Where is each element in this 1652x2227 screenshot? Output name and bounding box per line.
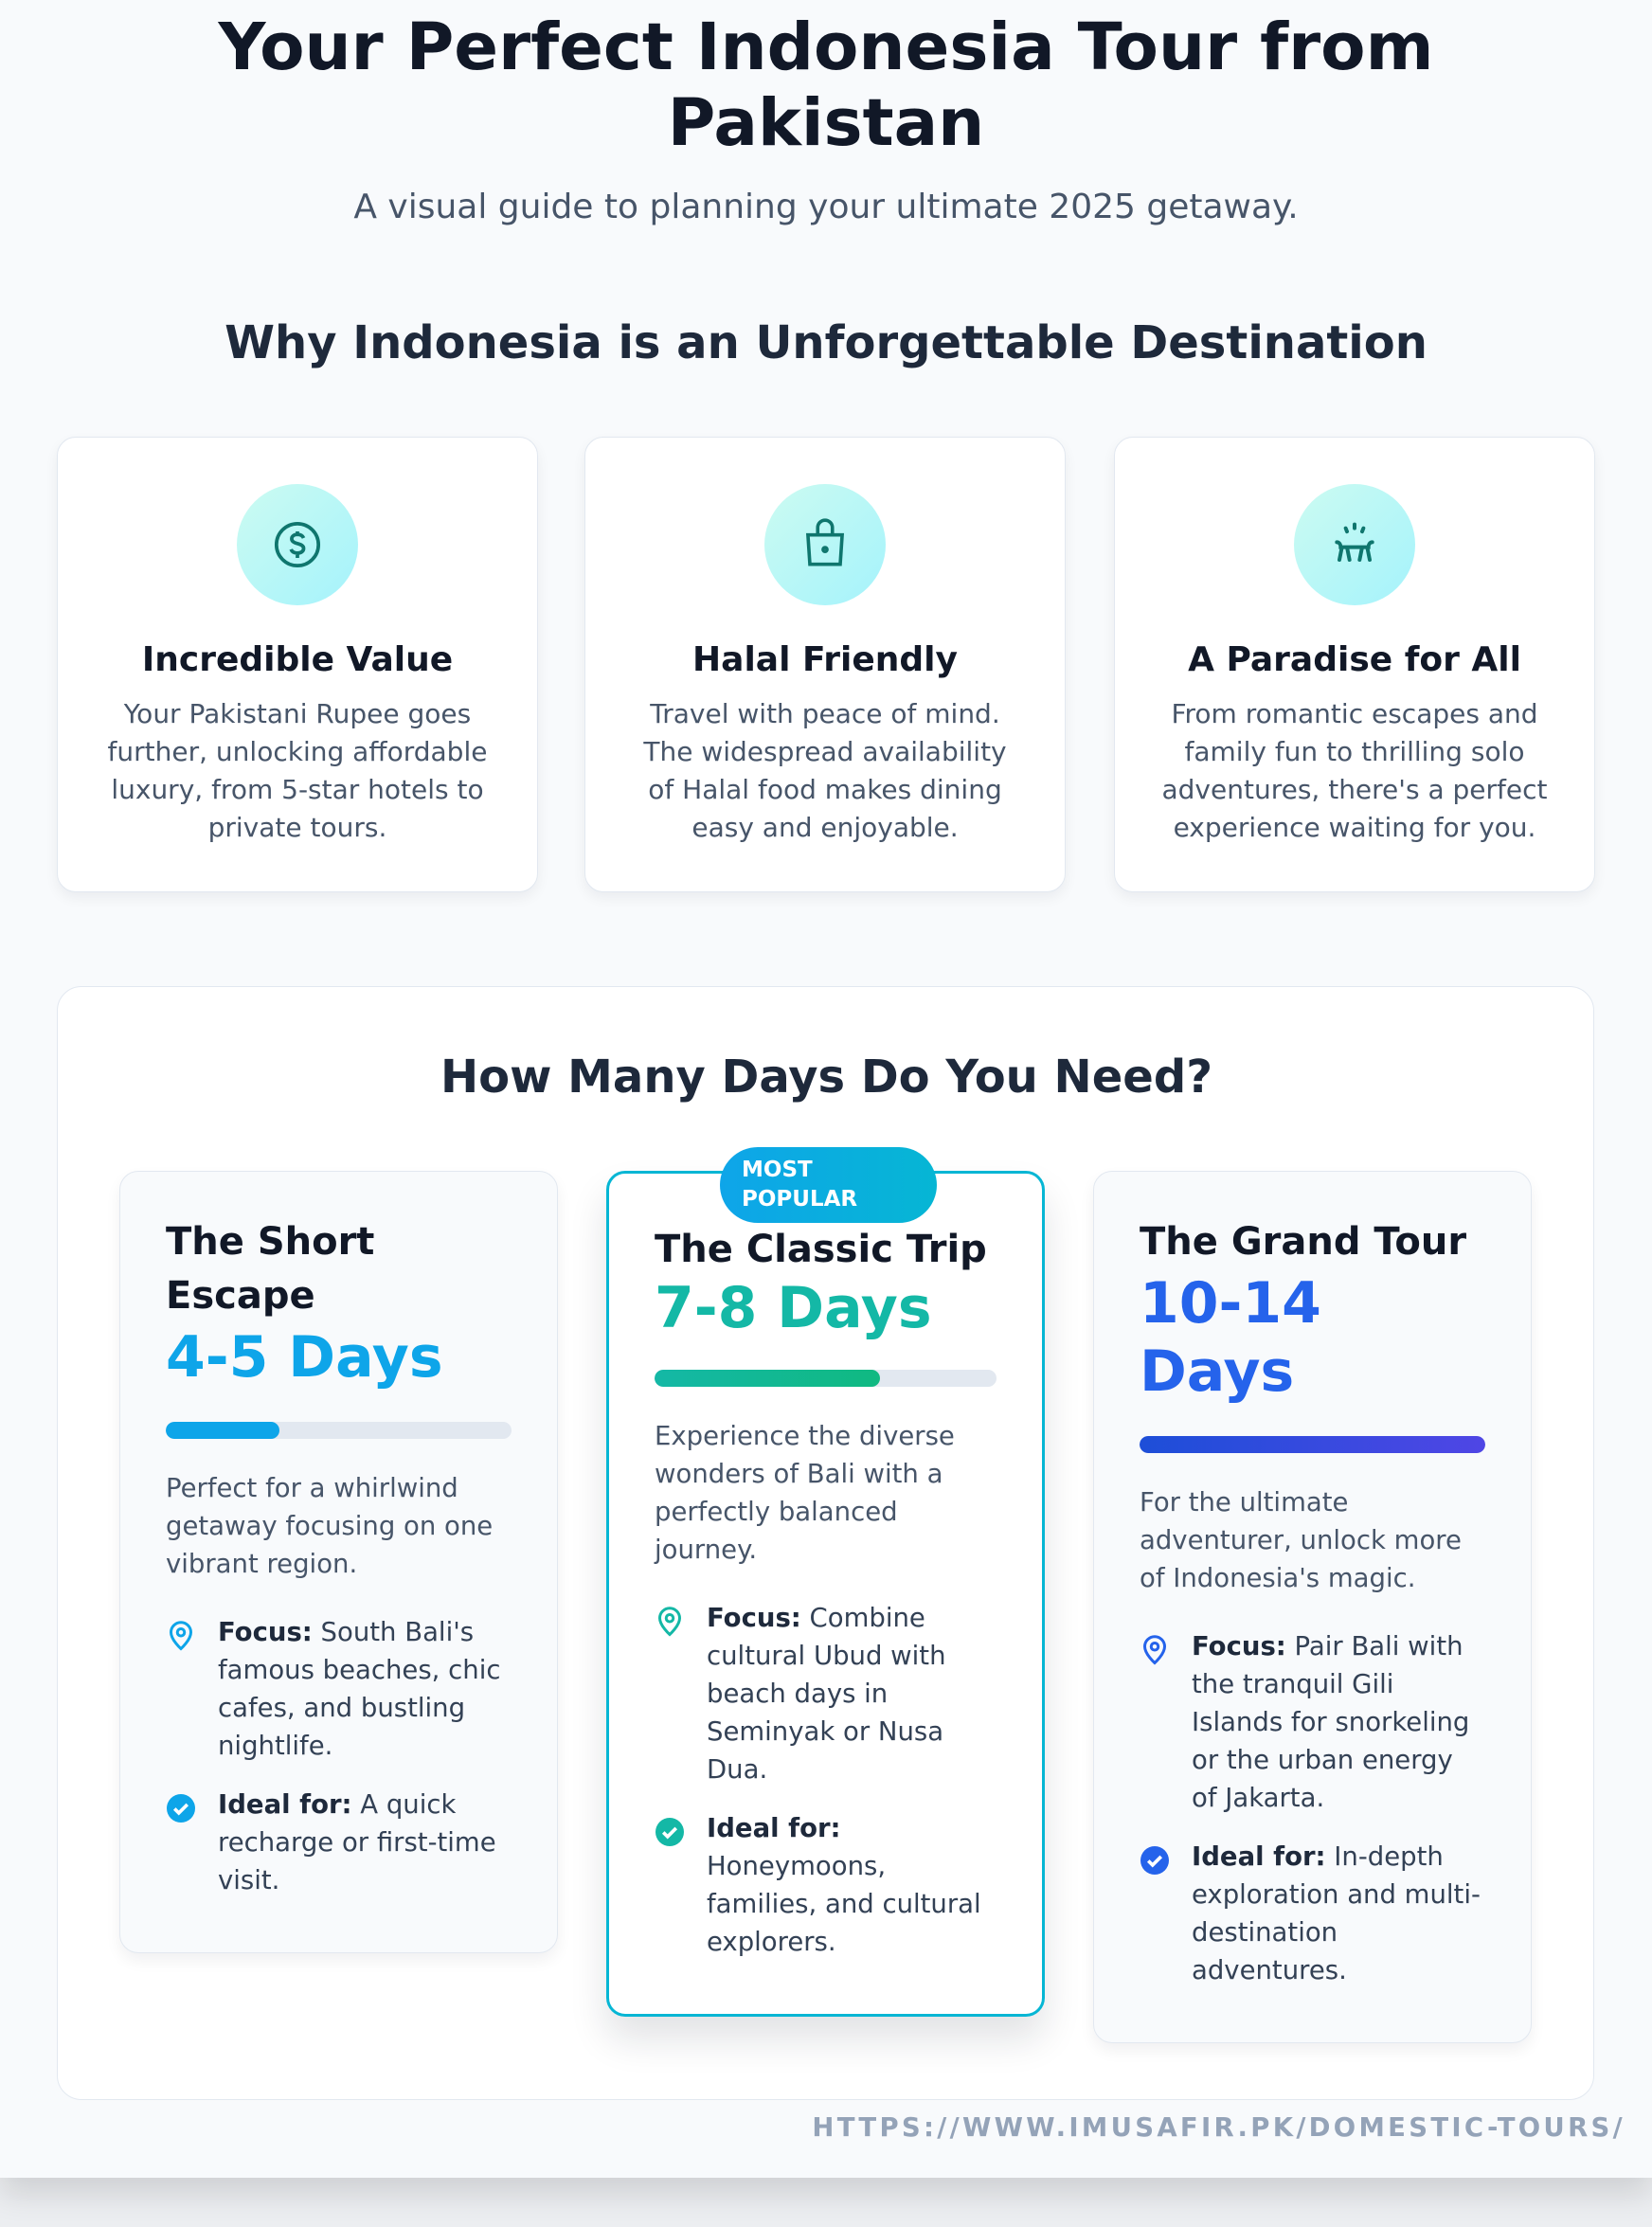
card: grand tour: 10-14 — [1140, 1270, 1321, 1337]
card: short escape: 4-5 Days — [166, 1324, 443, 1391]
card: grand tour: The Grand Tour — [1140, 1220, 1466, 1264]
focus item — [1143, 1631, 1469, 1813]
focus item: Focus: South Bali's famous beaches, chic cafes, and bustling nightlife. — [218, 1617, 500, 1761]
panel: how many days — [57, 986, 1594, 2100]
badge: most popular — [720, 1147, 937, 1223]
heading: how many days: How Many Days Do You Need? — [440, 1051, 1212, 1104]
icon: celebration — [1294, 484, 1415, 605]
icon: dollar — [237, 484, 358, 605]
panel: paradise for all: From romantic escapes and family fun to thrilling solo adventures, there's a perfect experience waiting for you. — [1161, 698, 1548, 843]
focus item: of Jakarta. — [1192, 1783, 1324, 1813]
footer url: HTTPS://WWW.IMUSAFIR.PK/DOMESTIC-TOURS/ — [812, 2112, 1625, 2143]
progress bar — [655, 1370, 997, 1387]
heading: why indonesia: Why Indonesia is an Unforgettable Destination — [224, 316, 1428, 369]
card: grand tour: Days — [1140, 1338, 1294, 1405]
focus item: Focus: Pair Bali with the tranquil Gili Islands for snorkeling or the urban energy — [1192, 1631, 1469, 1775]
title: Your Perfect Indonesia Tour from — [219, 9, 1433, 85]
ideal item: Ideal for: In-depth exploration and multi-destination adventures. — [1192, 1841, 1481, 1985]
card: grand tour — [1093, 1171, 1532, 2043]
panel: paradise for all: A Paradise for All — [1188, 640, 1521, 679]
focus item: Focus: Combine cultural Ubud with beach days in Seminyak or Nusa Dua. — [707, 1603, 945, 1785]
card: short escape — [119, 1171, 558, 1953]
card: classic trip — [606, 1171, 1045, 2017]
card: classic trip: The Classic Trip — [655, 1228, 987, 1271]
panel: halal friendly — [584, 437, 1066, 892]
card: short escape: The Short — [166, 1220, 374, 1264]
progress bar — [1140, 1436, 1485, 1453]
card: short escape: Escape — [166, 1274, 315, 1318]
panel: incredible value: Your Pakistani Rupee goes further, unlocking affordable luxury, from 5-star hotels to private tours. — [108, 698, 487, 843]
panel: paradise for all — [1114, 437, 1595, 892]
panel: incredible value: Incredible Value — [142, 640, 453, 679]
ideal item: Ideal for: A quick recharge or first-time visit. — [218, 1789, 496, 1895]
panel: halal friendly: Halal Friendly — [692, 640, 958, 679]
card: classic trip: 7-8 Days — [655, 1275, 932, 1341]
icon: bag — [764, 484, 886, 605]
progress bar — [166, 1422, 512, 1439]
title — [218, 9, 1433, 161]
panel: incredible value — [57, 437, 538, 892]
subtitle: A visual guide to planning your ultimate 2025 getaway. — [353, 188, 1299, 226]
badge: most popular: MOST — [742, 1158, 813, 1182]
badge: most popular: POPULAR — [742, 1187, 857, 1212]
card: grand tour: For the ultimate adventurer, unlock more of Indonesia's magic. — [1140, 1487, 1462, 1593]
panel: halal friendly: Travel with peace of mind. The widespread availability of Halal food makes dining easy and enjoyable. — [643, 698, 1007, 843]
card: classic trip: Experience the diverse wonders of Bali with a perfectly balanced journey. — [655, 1421, 955, 1565]
ideal item: Ideal for: Honeymoons, families, and cultural explorers. — [707, 1813, 981, 1957]
title: Pakistan — [668, 85, 984, 161]
card: short escape: Perfect for a whirlwind getaway focusing on one vibrant region. — [166, 1473, 493, 1579]
